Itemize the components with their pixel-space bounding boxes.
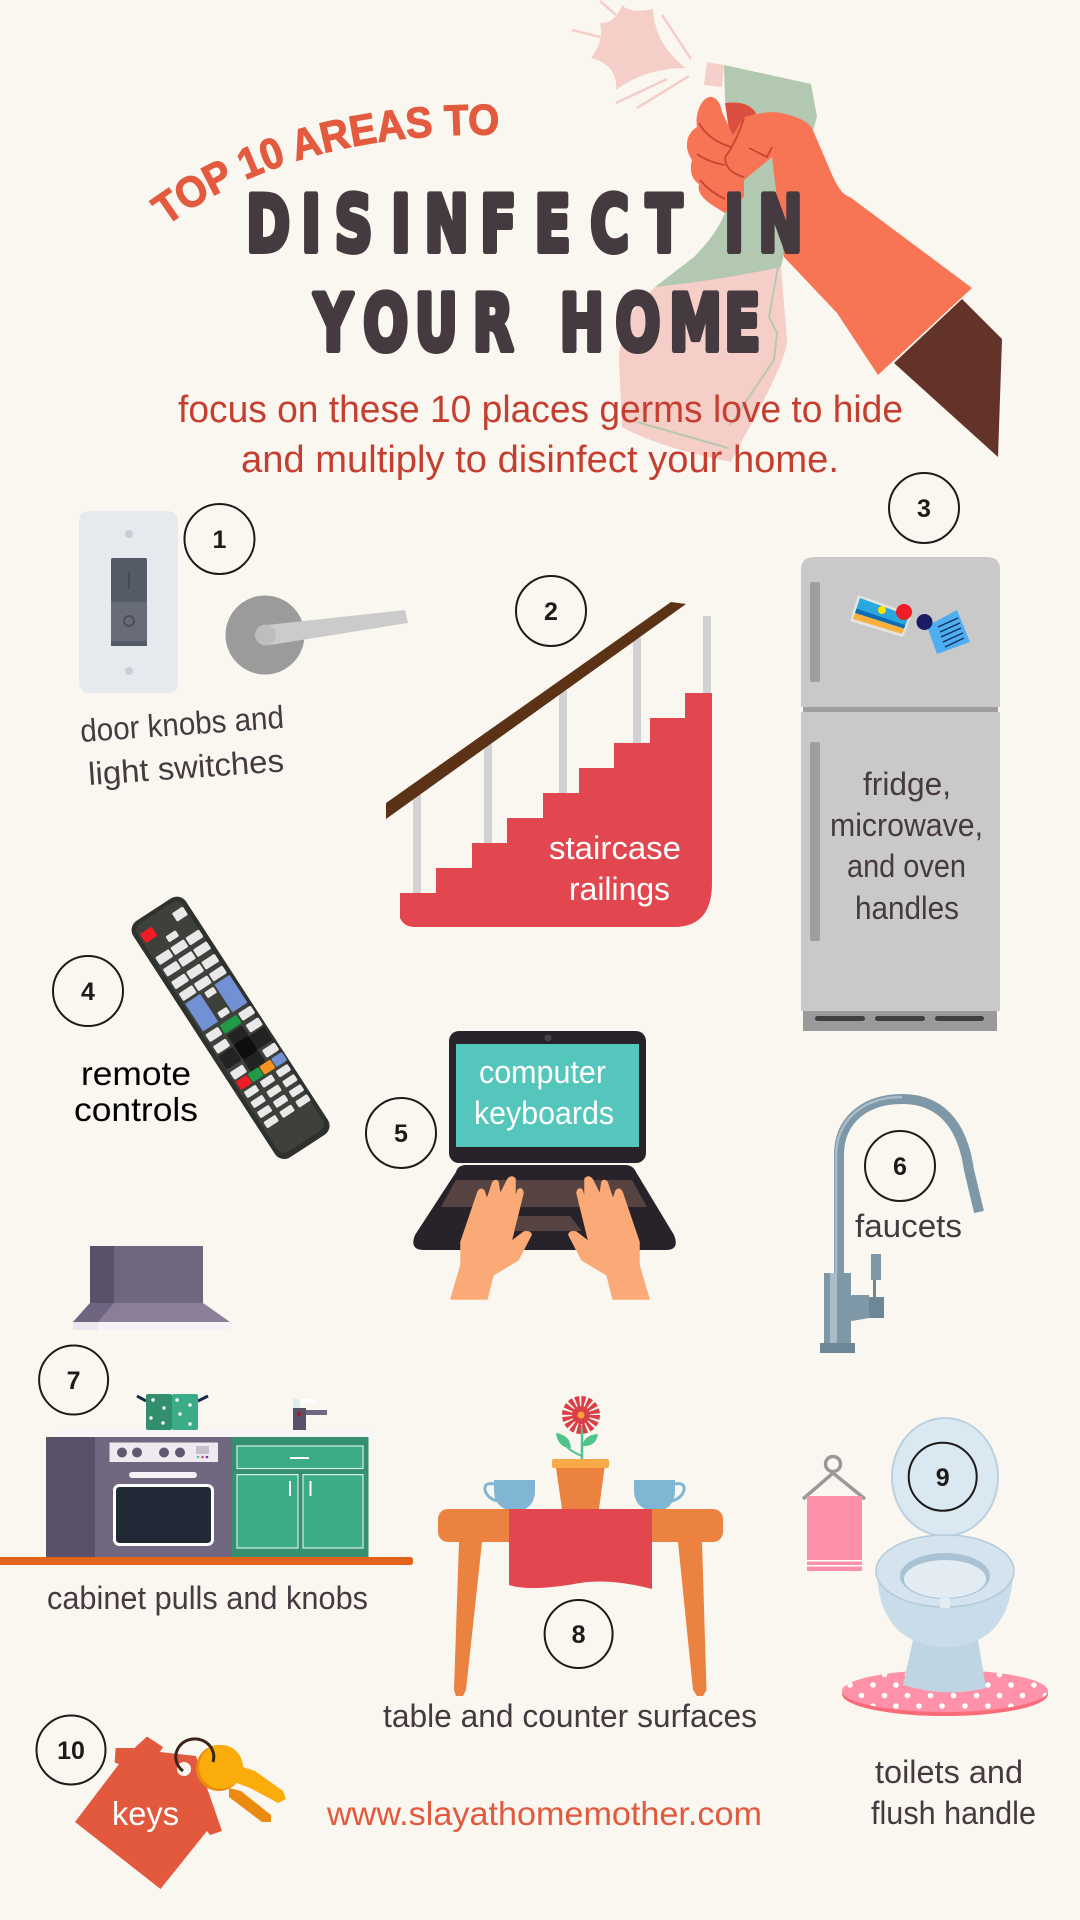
heading: YOUR HOME (313, 277, 760, 369)
label: faucets: faucets (855, 1208, 962, 1244)
icon: balusters (413, 616, 711, 894)
label: staircase railings (549, 830, 681, 907)
icon: small tap (293, 1399, 327, 1430)
icon: handrail (386, 602, 686, 819)
badge 4: 4 (81, 978, 95, 1006)
icon: door handle (226, 596, 408, 674)
icon: pot (137, 1394, 208, 1430)
label: computer keyboards: keyboards (474, 1095, 614, 1131)
icon: range hood (73, 1246, 231, 1330)
badge 10 (36, 1716, 106, 1784)
illustration: spray bottle in hand (572, 1, 1002, 462)
title: top 10 areas to: TOP 10 AREAS TO (148, 104, 498, 222)
icon: keys (196, 1745, 286, 1822)
label: fridge, microwave, and oven handles (830, 766, 983, 926)
label: toilets and flush handle: flush handle (871, 1795, 1036, 1831)
item 6: faucet (820, 1097, 979, 1353)
badge 8: 8 (572, 1621, 586, 1649)
badge 10: 10 (57, 1737, 85, 1765)
badge 1: 1 (213, 526, 227, 554)
badge 9 (909, 1443, 977, 1511)
item 1: door knob and light switch (79, 504, 408, 792)
icon: remote control (127, 892, 334, 1163)
spray burst (572, 1, 691, 108)
label: keys: keys (112, 1795, 179, 1832)
icon: laptop (413, 1031, 676, 1250)
heading: DISINFECT IN (246, 178, 803, 270)
badge 8 (545, 1600, 613, 1668)
label: fridge, microwave, and oven handles: microwave, (830, 807, 983, 843)
badge 7: 7 (67, 1367, 81, 1395)
icon: hands (451, 1177, 649, 1299)
badge 2 (516, 576, 586, 646)
label: cabinet pulls and knobs: cabinet pulls and knobs (47, 1580, 368, 1616)
badge 3: 3 (917, 495, 931, 523)
badge 5: 5 (394, 1120, 408, 1148)
label: table and counter surfaces: table and counter surfaces (383, 1698, 757, 1734)
badge 6 (865, 1131, 935, 1201)
icon: house key tag (75, 1736, 222, 1889)
item 8: table (383, 1402, 757, 1734)
label: toilets and flush handle: toilets and (875, 1754, 1023, 1790)
label: remote controls (74, 1055, 198, 1128)
item 7: kitchen (0, 1246, 413, 1616)
item 9: toilet (803, 1418, 1048, 1831)
heading (246, 178, 803, 369)
subtitle: focus on these 10 places germs love to hide (178, 389, 903, 431)
label: fridge, microwave, and oven handles: handles (855, 890, 959, 926)
label: staircase railings: railings (569, 871, 670, 907)
icon: green cabinet (232, 1437, 368, 1557)
item 2: staircase (386, 576, 712, 927)
hand and glove (687, 97, 1002, 457)
subtitle (178, 389, 903, 481)
icon: towel (803, 1456, 865, 1571)
icon: rug (842, 1670, 1048, 1716)
bottle (619, 62, 817, 462)
label: remote controls: remote (81, 1055, 191, 1092)
icon: light switch (79, 511, 178, 693)
label: door knobs and light switches (79, 699, 285, 792)
badge 5 (366, 1098, 436, 1168)
icon: fridge magnets (850, 595, 970, 654)
label: door knobs and light switches: light switches (87, 742, 285, 792)
item 10: keys (36, 1716, 286, 1889)
label: door knobs and light switches: door knobs and (79, 699, 285, 749)
icon: toilet (876, 1418, 1014, 1692)
label: fridge, microwave, and oven handles: and oven (847, 848, 966, 884)
icon: flower pot (552, 1402, 609, 1509)
icon: tablecloth (509, 1509, 652, 1589)
label: fridge, microwave, and oven handles: fridge, (863, 766, 951, 802)
label: toilets and flush handle (871, 1754, 1036, 1831)
badge 1 (184, 504, 254, 574)
subtitle: and multiply to disinfect your home. (241, 439, 839, 481)
badge 2: 2 (544, 598, 558, 626)
icon: key ring (176, 1739, 214, 1771)
badge 7 (39, 1346, 108, 1414)
icon: faucet (820, 1097, 979, 1353)
icon: orange shelf (0, 1557, 413, 1565)
item 4: remote (53, 892, 334, 1163)
label: staircase railings: staircase (549, 830, 681, 866)
label: computer keyboards: computer (479, 1054, 606, 1090)
item 3: fridge (801, 473, 1000, 1031)
item 5: laptop (366, 1031, 676, 1299)
icon: oven (46, 1430, 376, 1557)
badge 4 (53, 956, 123, 1026)
icon: stairs (400, 693, 712, 927)
badge 6: 6 (893, 1153, 907, 1181)
icon: fridge body (801, 557, 1000, 1031)
website url: www.slayathomemother.com (326, 1795, 762, 1832)
label: remote controls: controls (74, 1091, 198, 1128)
badge 3 (889, 473, 959, 543)
label: computer keyboards (474, 1054, 614, 1131)
badge 9: 9 (936, 1464, 950, 1492)
icon: table (438, 1509, 723, 1696)
icon: cups (485, 1480, 684, 1509)
